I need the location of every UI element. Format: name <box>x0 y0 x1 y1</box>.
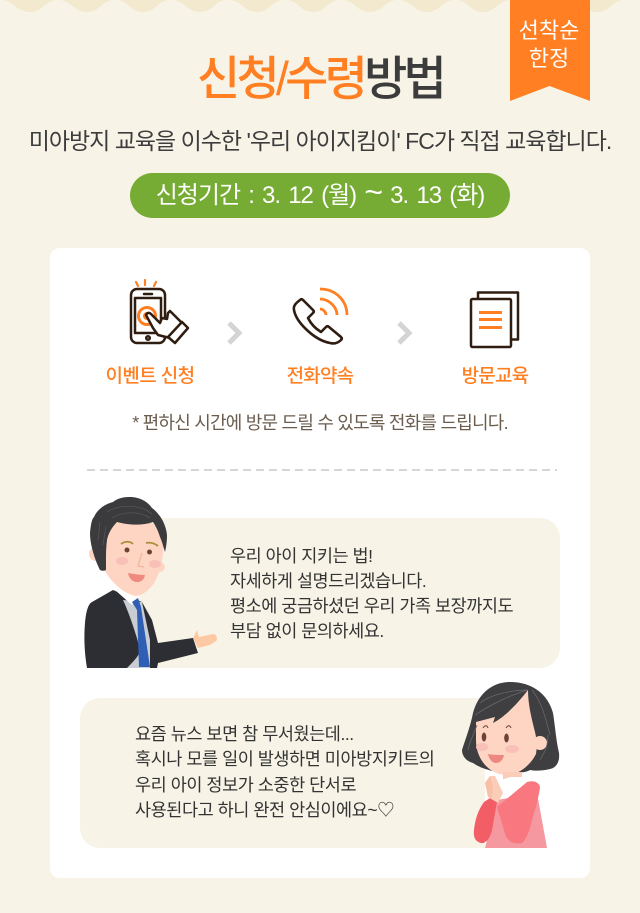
bubble text 2 <box>135 724 434 820</box>
icon: telephone <box>292 288 348 345</box>
arrow 1 <box>227 321 242 345</box>
date pill <box>130 173 510 218</box>
bubble text 1: 우리 아이 지키는 법! <box>230 546 372 566</box>
speech bubble 1 <box>130 518 560 668</box>
icon: documents <box>470 291 520 348</box>
bubble text 1: 부담 없이 문의하세요. <box>230 621 384 641</box>
bubble text 1: 자세하게 설명드리겠습니다. <box>230 571 426 591</box>
bubble text 1 <box>230 546 513 641</box>
speech bubble 2 <box>80 698 485 848</box>
subtitle: 미아방지 교육을 이수한 '우리 아이지킴이' FC가 직접 교육합니다. <box>29 128 611 154</box>
bubble text 2: 혹시나 모를 일이 발생하면 미아방지키트의 <box>135 749 434 769</box>
arrow 2 <box>397 321 412 345</box>
date pill: 신청기간 : 3. 12 (월) ~ 3. 13 (화) <box>156 174 484 210</box>
jacket <box>84 590 198 668</box>
character: woman <box>462 682 560 848</box>
bubble text 1: 평소에 궁금하셨던 우리 가족 보장까지도 <box>230 596 513 616</box>
ribbon badge: 한정 <box>529 46 569 71</box>
bubble text 2: 사용된다고 하니 완전 안심이에요~♡ <box>135 800 394 820</box>
text: 방문교육 <box>462 366 528 387</box>
white panel <box>50 248 590 878</box>
ribbon badge <box>510 0 590 101</box>
decorative wave top <box>3 0 622 12</box>
step labels: 이벤트 신청 <box>105 366 195 387</box>
text: 전화약속 <box>287 366 353 387</box>
title: 신청/수령방법 <box>197 52 443 105</box>
ribbon badge: 선착순 <box>519 18 579 43</box>
bubble text 2: 우리 아이 정보가 소중한 단서로 <box>135 775 356 795</box>
bubble text 2: 요즘 뉴스 보면 참 무서웠는데... <box>135 724 354 744</box>
character: man <box>84 497 217 668</box>
icon: phone tap <box>130 278 190 344</box>
note: * 편하신 시간에 방문 드릴 수 있도록 전화를 드립니다. <box>132 413 508 433</box>
